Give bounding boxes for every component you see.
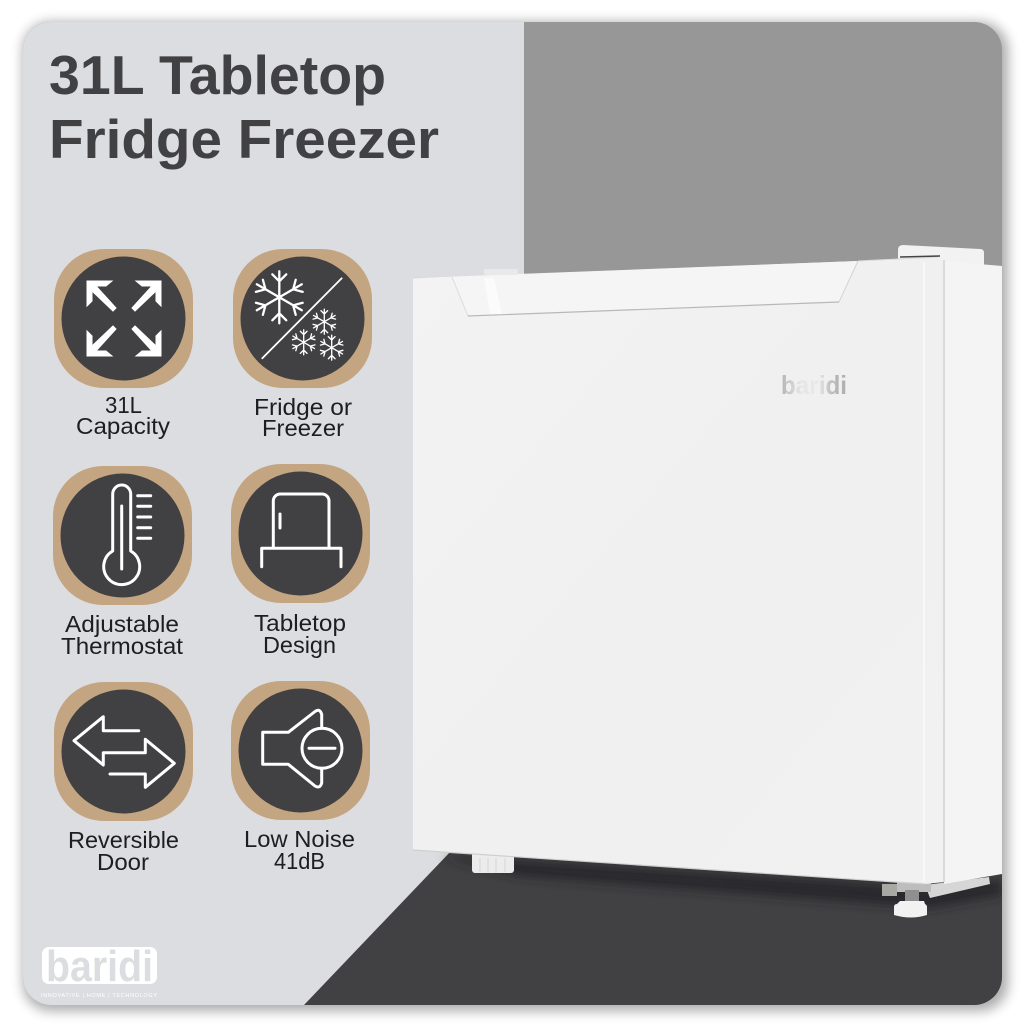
label: Capacity	[76, 413, 171, 439]
door handle recess	[452, 261, 858, 316]
label: Thermostat	[61, 633, 184, 659]
feature: 31L capacity	[54, 249, 193, 439]
panel: dark floor	[300, 850, 1002, 1005]
feature: reversible door	[54, 682, 193, 875]
fridge door	[413, 257, 945, 884]
icon: speaker with minus	[231, 681, 370, 820]
hinge	[898, 245, 984, 264]
label	[254, 610, 346, 658]
icon: reversible arrows	[54, 682, 193, 821]
fridge brand logo: baridi	[781, 370, 847, 400]
label: Tabletop	[254, 610, 346, 636]
label: 31L	[105, 392, 142, 418]
icon: thermometer	[53, 466, 192, 605]
label	[62, 615, 183, 654]
label: Design	[263, 632, 336, 658]
label: Door	[97, 849, 149, 875]
fridge floor shadow	[440, 856, 1002, 908]
title: 31L Tabletop	[49, 44, 386, 106]
label	[256, 398, 352, 436]
feature: fridge or freezer	[233, 249, 372, 441]
label: Reversible	[68, 827, 179, 853]
icon: fridge on table	[231, 464, 370, 603]
brand tagline: INNOVATIVE | HOME | TECHNOLOGY	[41, 993, 157, 999]
label: Freezer	[262, 415, 344, 441]
feature: low noise	[231, 681, 370, 874]
panel: light grey left column	[23, 22, 524, 1005]
feature: adjustable thermostat	[53, 466, 192, 659]
label: Adjustable	[65, 611, 179, 637]
feature: tabletop design	[231, 464, 370, 658]
fridge product	[413, 245, 1002, 918]
label	[70, 831, 178, 870]
title	[49, 44, 439, 170]
icon: snowflakes	[233, 249, 372, 388]
label: 41dB	[274, 848, 325, 874]
label: Low Noise	[244, 826, 355, 852]
left foot	[472, 854, 514, 873]
title: Fridge Freezer	[49, 108, 439, 170]
label	[246, 830, 354, 869]
brand logo: baridi	[46, 942, 153, 991]
icon: expand arrows	[54, 249, 193, 388]
right foot and bracket	[882, 877, 990, 918]
fridge side	[944, 261, 1002, 884]
label: Fridge or	[254, 394, 352, 420]
label	[77, 397, 170, 439]
